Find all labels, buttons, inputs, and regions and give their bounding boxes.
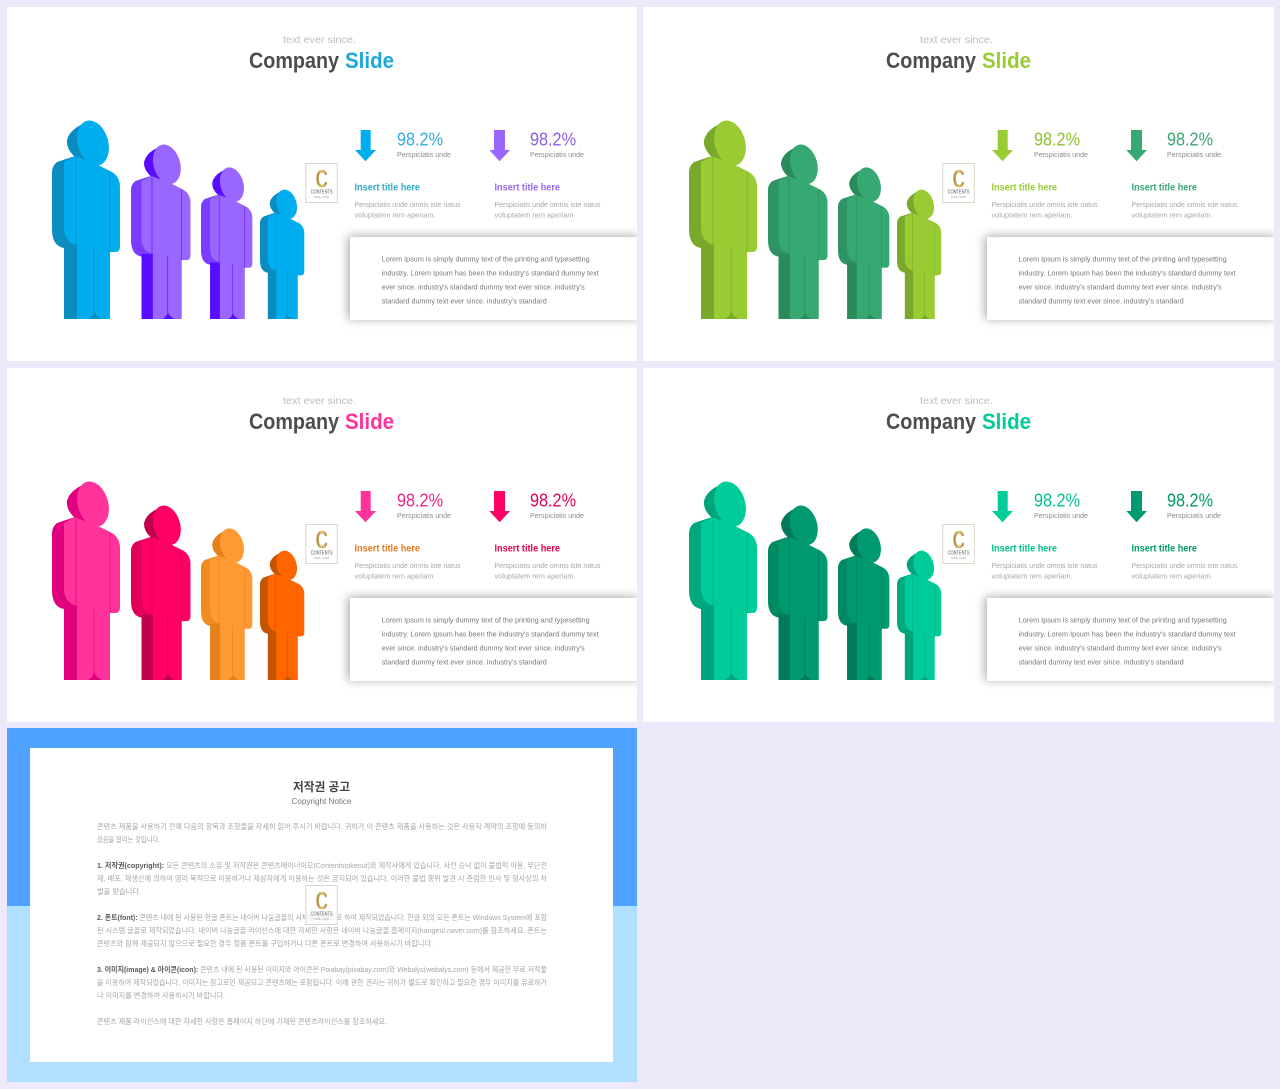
card: lorem ipsum [350, 598, 640, 681]
logo badge: CONTENTS [948, 190, 970, 196]
logo badge: C [316, 888, 328, 916]
card: lorem ipsum: standard dummy text ever since. industry's standard [382, 658, 547, 666]
stat: right arrow and value: 98.2% [530, 130, 576, 150]
figures: four people descending in height [689, 478, 941, 680]
text block: left title: voluptatem rem aperiam. [354, 572, 436, 581]
logo badge: MAIL.COM [314, 917, 330, 921]
stat: right arrow and value [489, 130, 584, 161]
text block: right title: voluptatem rem aperiam. [1132, 572, 1212, 581]
text block: right title: Perspiciatis unde omnis iste natus [1132, 200, 1238, 209]
notice intro: 콘텐츠 제품을 사용하기 전에 다음의 항목과 조항들을 자세히 읽어 주시기 바랍니다. 귀하가 이 콘텐츠 제품을 사용하는 것은 사용자 계약의 조항에 동의하 [97, 821, 547, 831]
logo badge [943, 164, 974, 202]
heading: Slide [345, 409, 394, 434]
heading: Company [249, 48, 340, 73]
heading: text ever since. [920, 34, 993, 46]
heading: Company [249, 409, 340, 434]
logo badge: C [316, 526, 328, 554]
notice title: 저작권 공고 [293, 779, 350, 794]
stat: right arrow and value: Perspiciatis unde [530, 511, 584, 520]
figures: four people descending in height [52, 478, 304, 680]
text block: left title: Insert title here [992, 544, 1057, 555]
card: lorem ipsum: standard dummy text ever since. industry's standard [382, 296, 547, 306]
logo badge [943, 524, 974, 564]
heading: Company [886, 48, 977, 73]
card: lorem ipsum: industry. Lorem Ipsum has been the industry's standard dummy text [382, 268, 600, 278]
stat: left arrow and value: Perspiciatis unde [397, 511, 451, 520]
card: lorem ipsum: industry. Lorem Ipsum has been the industry's standard dummy text [1019, 268, 1237, 278]
text block: right title [494, 544, 601, 581]
notice intro: 셨음을 알리는 것입니다. [97, 834, 160, 844]
heading: Slide [982, 48, 1031, 73]
stat: left arrow and value [355, 130, 451, 161]
text block: left title: Perspiciatis unde omnis iste natus [354, 561, 461, 570]
notice section 2: 2. 폰트(font): 콘텐츠 내에 된 사용된 한글 폰트는 네이버 나눔글꼴의 서체를 바탕으로 하여 제작되었습니다. 한글 외의 모든 폰트는 Windows System에 포함 [97, 912, 547, 922]
text block: right title: voluptatem rem aperiam. [494, 211, 576, 220]
notice intro [97, 821, 547, 844]
card: lorem ipsum: Lorem Ipsum is simply dummy text of the printing and typesetting [1019, 254, 1227, 264]
notice section 3: 을 이용하여 제작되었습니다. 이미지는 참고로만 제공되고 콘텐츠에는 포함됩니다. 이에 관한 권리는 귀하가 별도로 확인하고 필요한 경우 이미지를 유료하거 [97, 977, 547, 987]
text block: left title: voluptatem rem aperiam. [992, 211, 1072, 220]
stat: right arrow and value: Perspiciatis unde [1167, 511, 1221, 520]
text block: right title [1132, 183, 1238, 220]
card: lorem ipsum: ever since. industry's standard dummy text ever since. industry's [382, 644, 585, 652]
card: lorem ipsum: Lorem Ipsum is simply dummy text of the printing and typesetting [382, 616, 590, 624]
panel: copyright notice [7, 728, 637, 1082]
card: lorem ipsum: standard dummy text ever since. industry's standard [1019, 658, 1184, 666]
heading [249, 395, 394, 434]
figures: four people descending in height [689, 117, 941, 319]
logo badge [306, 164, 337, 202]
heading: Slide [345, 48, 394, 73]
notice section 2: 콘텐츠와 함께 제공되지 않으므로 필요한 경우 정품 폰트를 구입하거나 다른 폰트로 변경하여 사용하시기 바랍니다. [97, 938, 433, 948]
panel: green slide [643, 7, 1277, 361]
panel: emerald slide [643, 368, 1277, 722]
text block: left title [354, 544, 461, 581]
text block: right title [1132, 544, 1238, 581]
logo badge: MAIL.COM [951, 556, 967, 560]
text block: left title [992, 544, 1098, 581]
card: lorem ipsum: ever since. industry's standard dummy text ever since. industry's [382, 282, 585, 292]
text block: left title [354, 183, 461, 220]
card: lorem ipsum [350, 237, 640, 320]
stat: right arrow and value [1126, 490, 1221, 522]
text block: right title: Perspiciatis unde omnis iste natus [494, 561, 601, 570]
logo badge [306, 886, 337, 924]
logo badge: CONTENTS [311, 912, 333, 918]
heading: Slide [982, 409, 1031, 434]
notice section 1: 재, 배포, 재생산에 의하여 영리 목적으로 이용하거나 제삼자에게 이용하는 것은 금지되어 있습니다. 이러한 불법 행위 발견 시 준엄한 민사 및 형사상의 처 [97, 873, 547, 883]
heading [886, 395, 1031, 434]
stat: left arrow and value: Perspiciatis unde [1034, 511, 1088, 520]
stat: right arrow and value [1126, 130, 1221, 161]
logo badge [306, 524, 337, 564]
stat: left arrow and value [992, 490, 1088, 522]
stat: right arrow and value: Perspiciatis unde [1167, 150, 1221, 159]
text block: right title: Insert title here [1132, 544, 1197, 555]
text block: right title: voluptatem rem aperiam. [494, 572, 576, 581]
heading: text ever since. [920, 395, 993, 407]
text block: left title: Perspiciatis unde omnis iste natus [992, 561, 1098, 570]
text block: right title: Perspiciatis unde omnis iste natus [494, 200, 601, 209]
card: lorem ipsum [987, 237, 1277, 320]
text block: right title: voluptatem rem aperiam. [1132, 211, 1212, 220]
logo badge: MAIL.COM [314, 195, 330, 199]
text block: right title: Insert title here [1132, 183, 1197, 194]
logo badge: CONTENTS [311, 190, 333, 196]
stat: left arrow and value: 98.2% [1034, 130, 1080, 150]
text block: left title: voluptatem rem aperiam. [992, 572, 1072, 581]
heading [886, 34, 1031, 73]
figures: four people descending in height [52, 117, 304, 319]
logo badge: C [953, 526, 965, 554]
card: lorem ipsum: industry. Lorem Ipsum has been the industry's standard dummy text [382, 630, 600, 638]
stat: left arrow and value: 98.2% [1034, 490, 1080, 510]
panel: blue and purple slide [7, 7, 640, 361]
stat: right arrow and value [489, 490, 584, 522]
notice section 1 [97, 860, 547, 896]
logo badge: CONTENTS [311, 550, 333, 556]
text block: left title: voluptatem rem aperiam. [354, 211, 436, 220]
stat: right arrow and value: 98.2% [1167, 130, 1213, 150]
notice section 3 [97, 964, 547, 1000]
logo badge: MAIL.COM [951, 195, 967, 199]
notice section 2 [97, 912, 547, 948]
heading: text ever since. [283, 34, 356, 46]
text block: right title: Insert title here [494, 544, 560, 555]
notice closing line: 콘텐츠 제품 라이선스에 대한 자세한 사항은 홈페이지 하단에 기재된 콘텐츠라이선스를 참조하세요. [97, 1016, 387, 1026]
logo badge: C [953, 166, 965, 194]
heading: Company [886, 409, 977, 434]
card: lorem ipsum: ever since. industry's standard dummy text ever since. industry's [1019, 644, 1222, 652]
card: lorem ipsum: industry. Lorem Ipsum has been the industry's standard dummy text [1019, 630, 1237, 638]
panel: pink and orange slide [7, 368, 640, 722]
stat: left arrow and value: Perspiciatis unde [1034, 150, 1088, 159]
text block: left title: Perspiciatis unde omnis iste natus [354, 200, 461, 209]
logo badge: C [316, 166, 328, 194]
stat: left arrow and value: 98.2% [397, 130, 443, 150]
text block: left title: Insert title here [354, 544, 420, 555]
logo badge: MAIL.COM [314, 556, 330, 560]
notice title [292, 779, 352, 806]
text block: left title: Insert title here [354, 183, 420, 194]
heading: text ever since. [283, 395, 356, 407]
stat: left arrow and value: Perspiciatis unde [397, 150, 451, 159]
stat: left arrow and value [992, 130, 1088, 161]
notice section 1: 1. 저작권(copyright): 모든 콘텐츠의 소유 및 저작권은 콘텐츠메이너이오(Contentstokeout)와 제작사에게 있습니다. 사전 승낙 없이 불법적 이용, 무단전 [97, 860, 547, 870]
text block: right title: Insert title here [494, 183, 560, 194]
notice section 1: 벌을 받습니다. [97, 886, 141, 896]
text block: right title [494, 183, 601, 220]
text block: left title: Perspiciatis unde omnis iste natus [992, 200, 1098, 209]
card: lorem ipsum: ever since. industry's standard dummy text ever since. industry's [1019, 282, 1222, 292]
logo badge: CONTENTS [948, 550, 970, 556]
text block: left title: Insert title here [992, 183, 1057, 194]
text block: left title [992, 183, 1098, 220]
text block: right title: Perspiciatis unde omnis iste natus [1132, 561, 1238, 570]
notice section 3: 나 이미지를 변경하여 사용하시기 바랍니다. [97, 990, 225, 1000]
notice section 3: 3. 이미지(image) & 아이콘(icon): 콘텐츠 내에 된 사용된 이미지와 아이콘은 Pixabay(pixabay.com)와 Webalys(webalys.com) 등에서 제공한 무료 저작물 [97, 964, 547, 974]
card: lorem ipsum [987, 598, 1277, 681]
card: lorem ipsum: standard dummy text ever since. industry's standard [1019, 296, 1184, 306]
card: lorem ipsum: Lorem Ipsum is simply dummy text of the printing and typesetting [382, 254, 590, 264]
stat: right arrow and value: 98.2% [530, 490, 576, 510]
notice section 2: 된 시스템 글꼴로 제작되었습니다. 네이버 나눔글꼴 라이선스에 대한 자세한 사항은 네이버 나눔글꼴 홈페이지(hangeul.naver.com)를 참조하세요. 폰트는 [97, 925, 547, 935]
card: lorem ipsum: Lorem Ipsum is simply dummy text of the printing and typesetting [1019, 616, 1227, 624]
stat: left arrow and value [355, 490, 451, 522]
stat: right arrow and value: 98.2% [1167, 490, 1213, 510]
stat: left arrow and value: 98.2% [397, 490, 443, 510]
notice title: Copyright Notice [292, 796, 352, 806]
stat: right arrow and value: Perspiciatis unde [530, 150, 584, 159]
heading [249, 34, 394, 73]
